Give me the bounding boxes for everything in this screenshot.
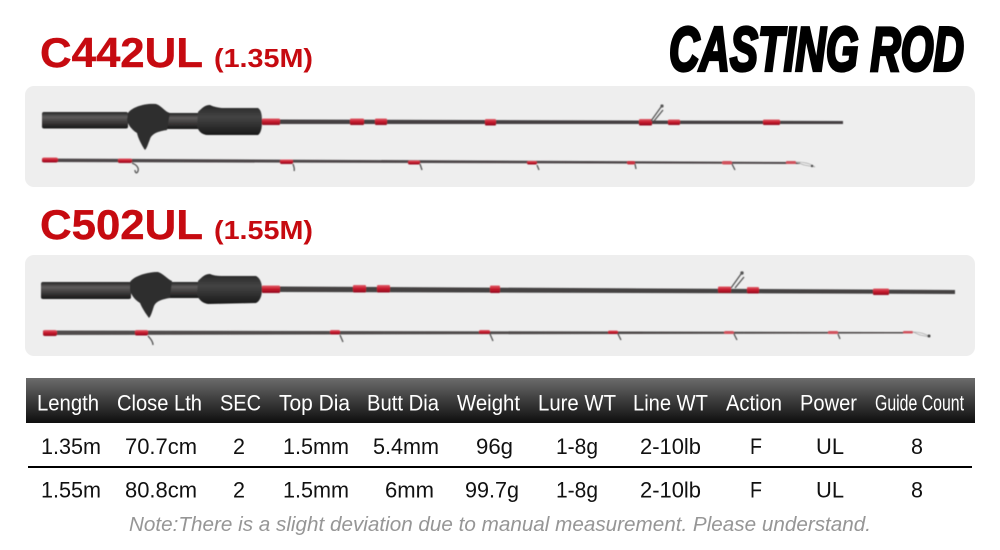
table header row	[26, 378, 975, 423]
table header row: Lure WT	[538, 390, 616, 416]
table header row: Guide Count	[875, 390, 964, 416]
note: measurement deviation: Note:There is a slight deviation due to manual measurement. Please understand.	[129, 514, 871, 536]
table header row: Length	[37, 390, 99, 416]
table row: 1.55m: 80.8cm	[125, 478, 197, 502]
table header row: SEC	[220, 390, 261, 416]
table row: 1.55m: 1.55m	[41, 478, 101, 502]
table row: 1.35m: 1.5mm	[283, 434, 349, 459]
table header row: Top Dia	[279, 390, 351, 416]
table row: 1.55m: 8	[911, 478, 923, 502]
heading: C442UL	[40, 29, 313, 76]
table header row: Line WT	[633, 390, 708, 416]
heading: C442UL: (1.35M)	[214, 43, 313, 73]
table row: 1.55m	[41, 478, 923, 502]
heading: C502UL: C502UL	[40, 201, 203, 248]
table row: 1.55m: 6mm	[385, 478, 434, 502]
table header row: Action	[726, 390, 782, 416]
table row: 1.55m: F	[750, 478, 762, 502]
table: specifications	[26, 378, 975, 502]
rod: C442UL butt section	[42, 104, 843, 150]
table row: 1.35m: 5.4mm	[373, 434, 439, 459]
table row: 1.35m: 1.35m	[41, 434, 101, 459]
table row: 1.35m: 70.7cm	[125, 434, 197, 459]
panel: C502UL rod photo	[25, 255, 975, 356]
table row: 1.35m: 1-8g	[556, 434, 598, 459]
rod: C502UL butt section	[41, 271, 955, 318]
table header row: Power	[800, 390, 857, 416]
table header row: Close Lth	[117, 390, 202, 416]
heading: C502UL	[40, 201, 313, 248]
table header row: Butt Dia	[367, 390, 440, 416]
table row: 1.55m: 1.5mm	[283, 478, 349, 502]
table header row: Weight	[457, 390, 520, 416]
panel: C442UL rod photo	[25, 86, 975, 187]
heading: C442UL: C442UL	[40, 29, 203, 76]
table row: 1.55m: 2	[233, 478, 245, 502]
table row: 1.35m: 96g	[476, 434, 513, 459]
table row: 1.35m: 8	[911, 434, 923, 459]
table row: 1.55m: 1-8g	[556, 478, 598, 502]
table row: 1.35m: F	[750, 434, 762, 459]
table row: 1.55m: 99.7g	[465, 478, 519, 502]
heading: C502UL: (1.55M)	[214, 215, 313, 245]
rod: C502UL tip section	[43, 330, 930, 345]
table row: 1.55m: UL	[816, 478, 844, 502]
table row: 1.35m: 2	[233, 434, 245, 459]
table row: 1.35m	[41, 434, 923, 459]
table row: 1.55m: 2-10lb	[640, 478, 701, 502]
rod: C442UL tip section	[42, 158, 815, 173]
table row: 1.35m: 2-10lb	[640, 434, 701, 459]
table row: 1.35m: UL	[816, 434, 844, 459]
